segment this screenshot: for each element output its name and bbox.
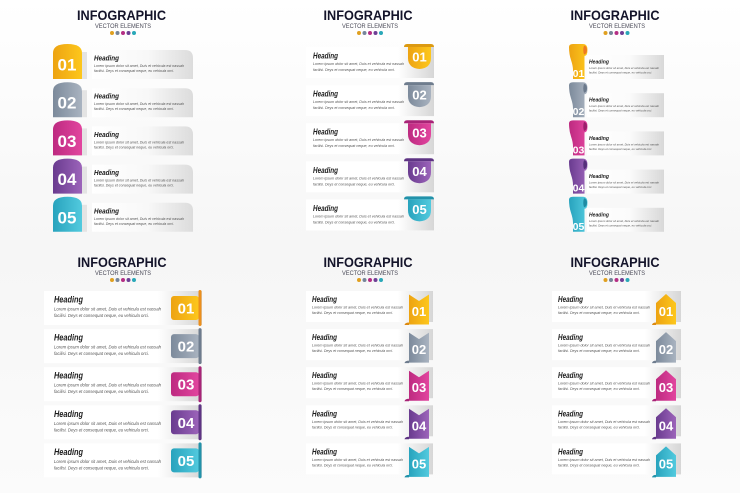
row 03 xyxy=(306,120,434,154)
row 05: facilisi. Deys et consequat neque, eu vehicula orci. xyxy=(94,222,174,226)
row 01: facilisi. Deys et consequat neque, eu vehicula orci. xyxy=(312,311,393,315)
row 01: Lorem ipsum dolor sit amet, Duis et vehicula est nassah xyxy=(313,62,404,66)
row 03: Lorem ipsum dolor sit amet, Duis et vehicula est nassah xyxy=(94,140,184,144)
colour dots xyxy=(604,278,630,282)
panel: bottom centre, notched tabs xyxy=(306,254,433,477)
panel: top left, arched tabs xyxy=(53,7,193,232)
row 01: Lorem ipsum dolor sit amet, Duis et vehicula est nassah xyxy=(94,64,184,68)
row 05: Heading xyxy=(94,208,120,215)
row 04: 04 xyxy=(178,415,195,432)
row 03: 03 xyxy=(659,380,673,395)
row 03 xyxy=(44,366,202,402)
row 03: Lorem ipsum dolor sit amet, Duis et vehicula est nassah xyxy=(558,382,650,386)
row 03: facilisi. Deys et consequat neque, eu vehicula orci. xyxy=(94,145,174,149)
row 04: Heading xyxy=(558,409,583,418)
row 03: Heading xyxy=(94,132,120,139)
row 02: facilisi. Deys et consequat neque, eu vehicula orci. xyxy=(589,109,652,113)
panel: top centre, shield tabs xyxy=(306,7,434,230)
row 05: Lorem ipsum dolor sit amet, Duis et vehicula est nassah xyxy=(589,219,659,223)
subtitle: VECTOR ELEMENTS xyxy=(342,23,399,30)
row 05: 05 xyxy=(412,202,427,217)
row 05: 05 xyxy=(659,456,673,471)
row 04: Lorem ipsum dolor sit amet, Duis et vehicula est nassah xyxy=(94,179,184,183)
row 04: Lorem ipsum dolor sit amet, Duis et vehicula est nassah xyxy=(54,421,162,426)
subtitle: VECTOR ELEMENTS xyxy=(95,270,152,277)
row 04: facilisi. Deys et consequat neque, eu vehicula orci. xyxy=(558,425,640,429)
row 04 xyxy=(53,159,193,194)
row 01: Heading xyxy=(558,295,583,304)
row 03: 03 xyxy=(573,144,584,156)
row 05: 05 xyxy=(58,208,76,227)
row 01: Heading xyxy=(94,56,120,62)
row 05: Heading xyxy=(558,447,583,456)
row 05: Heading xyxy=(313,204,338,213)
row 02: Lorem ipsum dolor sit amet, Duis et vehicula est nassah xyxy=(313,100,404,104)
row 04: Lorem ipsum dolor sit amet, Duis et vehicula est nassah xyxy=(313,176,404,180)
row 05: Lorem ipsum dolor sit amet, Duis et vehicula est nassah xyxy=(312,458,403,462)
row 02: facilisi. Deys et consequat neque, eu vehicula orci. xyxy=(54,351,149,356)
row 04 xyxy=(306,158,434,192)
row 02 xyxy=(53,82,193,117)
row 05 xyxy=(306,196,434,230)
row 01: Lorem ipsum dolor sit amet, Duis et vehicula est nassah xyxy=(558,306,650,310)
row 05: Heading xyxy=(54,447,83,457)
row 02: 02 xyxy=(58,94,76,113)
row 05 xyxy=(552,443,681,477)
row 01: facilisi. Deys et consequat neque, eu vehicula orci. xyxy=(589,70,652,74)
row 02 xyxy=(552,329,681,363)
row 01 xyxy=(53,44,193,79)
row 03: Heading xyxy=(558,371,583,380)
row 04: 04 xyxy=(573,183,584,195)
row 03: facilisi. Deys et consequat neque, eu vehicula orci. xyxy=(589,147,652,151)
row 03: facilisi. Deys et consequat neque, eu vehicula orci. xyxy=(54,389,149,394)
row 02: 02 xyxy=(412,342,426,357)
row 05 xyxy=(44,442,202,478)
row 03: Heading xyxy=(312,371,337,380)
row 02: Heading xyxy=(313,90,338,99)
row 01: 01 xyxy=(659,304,673,319)
row 02: Lorem ipsum dolor sit amet, Duis et vehicula est nassah xyxy=(589,104,659,108)
row 01: Heading xyxy=(589,60,610,66)
row 03: Heading xyxy=(54,371,83,381)
row 05: facilisi. Deys et consequat neque, eu vehicula orci. xyxy=(589,223,652,227)
row 04: Heading xyxy=(94,170,120,177)
row 05 xyxy=(569,197,664,233)
row 02: Heading xyxy=(54,333,83,343)
row 01: facilisi. Deys et consequat neque, eu vehicula orci. xyxy=(313,68,395,72)
row 05: 05 xyxy=(412,456,426,471)
row 01: 01 xyxy=(412,304,426,319)
row 04: Heading xyxy=(313,166,338,175)
row 03: facilisi. Deys et consequat neque, eu vehicula orci. xyxy=(313,144,395,148)
row 04 xyxy=(569,159,664,195)
row 05: facilisi. Deys et consequat neque, eu vehicula orci. xyxy=(54,465,149,470)
row 05 xyxy=(53,197,193,232)
row 02: facilisi. Deys et consequat neque, eu vehicula orci. xyxy=(312,349,393,353)
row 02: facilisi. Deys et consequat neque, eu vehicula orci. xyxy=(558,349,640,353)
row 02: 02 xyxy=(659,342,673,357)
row 04 xyxy=(552,405,681,439)
row 02: facilisi. Deys et consequat neque, eu vehicula orci. xyxy=(313,106,395,110)
row 02: 02 xyxy=(178,339,194,356)
row 01: 01 xyxy=(573,68,584,80)
row 05: facilisi. Deys et consequat neque, eu vehicula orci. xyxy=(313,220,395,224)
row 03: facilisi. Deys et consequat neque, eu vehicula orci. xyxy=(558,387,640,391)
row 01: 01 xyxy=(178,300,194,318)
row 04: facilisi. Deys et consequat neque, eu vehicula orci. xyxy=(312,425,393,429)
row 02: 02 xyxy=(412,88,427,103)
row 02: Lorem ipsum dolor sit amet, Duis et vehicula est nassah xyxy=(94,102,184,106)
row 04 xyxy=(44,404,202,440)
row 02 xyxy=(44,328,202,364)
row 03: facilisi. Deys et consequat neque, eu vehicula orci. xyxy=(312,387,393,391)
row 03: 03 xyxy=(178,377,194,394)
row 05: Lorem ipsum dolor sit amet, Duis et vehicula est nassah xyxy=(54,459,162,464)
row 05: facilisi. Deys et consequat neque, eu vehicula orci. xyxy=(312,463,393,467)
row 05: Heading xyxy=(312,447,337,456)
row 03: Heading xyxy=(313,128,338,137)
colour dots xyxy=(110,278,136,282)
colour dots xyxy=(604,31,630,35)
row 04: facilisi. Deys et consequat neque, eu vehicula orci. xyxy=(589,185,652,189)
row 04: Heading xyxy=(312,409,337,418)
row 01: Heading xyxy=(313,52,338,60)
row 02 xyxy=(569,82,664,118)
row 03 xyxy=(552,367,681,401)
row 02: Heading xyxy=(589,98,610,104)
colour dots xyxy=(357,278,383,282)
row 03: 03 xyxy=(412,380,426,395)
row 03: Lorem ipsum dolor sit amet, Duis et vehicula est nassah xyxy=(313,138,404,142)
row 01 xyxy=(44,290,202,326)
row 03 xyxy=(569,120,664,156)
colour dots xyxy=(110,31,136,35)
panel: bottom left, rounded tabs with strip xyxy=(44,254,202,478)
title: INFOGRAPHIC xyxy=(324,7,412,23)
title: INFOGRAPHIC xyxy=(570,254,660,270)
row 01: 01 xyxy=(412,50,427,64)
row 03: 03 xyxy=(58,132,76,151)
row 03: Lorem ipsum dolor sit amet, Duis et vehicula est nassah xyxy=(312,382,403,386)
row 01 xyxy=(569,44,664,80)
title: INFOGRAPHIC xyxy=(570,7,660,23)
row 03 xyxy=(53,120,193,155)
row 03 xyxy=(306,367,433,401)
row 04: facilisi. Deys et consequat neque, eu vehicula orci. xyxy=(54,427,149,432)
row 05: Heading xyxy=(589,212,610,218)
row 02 xyxy=(306,82,434,116)
row 02: facilisi. Deys et consequat neque, eu vehicula orci. xyxy=(94,107,174,111)
row 03: Heading xyxy=(589,136,610,142)
colour dots xyxy=(357,31,383,35)
row 02 xyxy=(306,329,433,363)
row 01: 01 xyxy=(58,56,76,74)
title: INFOGRAPHIC xyxy=(77,7,166,23)
row 04: Lorem ipsum dolor sit amet, Duis et vehicula est nassah xyxy=(312,420,403,424)
row 01 xyxy=(552,291,681,325)
row 02: 02 xyxy=(573,106,584,118)
title: INFOGRAPHIC xyxy=(324,254,412,270)
row 01: Lorem ipsum dolor sit amet, Duis et vehicula est nassah xyxy=(589,66,659,70)
row 05: Lorem ipsum dolor sit amet, Duis et vehicula est nassah xyxy=(313,214,404,218)
row 05: Lorem ipsum dolor sit amet, Duis et vehicula est nassah xyxy=(558,458,650,462)
row 03: Lorem ipsum dolor sit amet, Duis et vehicula est nassah xyxy=(589,142,659,146)
row 04: Heading xyxy=(589,174,610,180)
row 05: 05 xyxy=(573,221,584,233)
row 05: facilisi. Deys et consequat neque, eu vehicula orci. xyxy=(558,463,640,467)
row 05: 05 xyxy=(178,453,194,470)
row 01 xyxy=(306,291,433,325)
row 04: 04 xyxy=(412,164,427,179)
row 01: Heading xyxy=(312,295,337,304)
row 04: facilisi. Deys et consequat neque, eu vehicula orci. xyxy=(313,182,395,186)
row 02: Heading xyxy=(94,94,120,101)
row 05: Lorem ipsum dolor sit amet, Duis et vehicula est nassah xyxy=(94,217,184,221)
row 04: 04 xyxy=(659,418,674,433)
row 04: Lorem ipsum dolor sit amet, Duis et vehicula est nassah xyxy=(589,181,659,185)
row 01: facilisi. Deys et consequat neque, eu vehicula orci. xyxy=(54,313,149,318)
row 01: facilisi. Deys et consequat neque, eu vehicula orci. xyxy=(94,69,174,73)
row 01: facilisi. Deys et consequat neque, eu vehicula orci. xyxy=(558,311,640,315)
panel: top right, ribbon tabs xyxy=(569,7,664,233)
row 01: Lorem ipsum dolor sit amet, Duis et vehicula est nassah xyxy=(54,306,162,312)
row 01: Lorem ipsum dolor sit amet, Duis et vehicula est nassah xyxy=(312,306,403,310)
subtitle: VECTOR ELEMENTS xyxy=(342,270,399,277)
row 02: Lorem ipsum dolor sit amet, Duis et vehicula est nassah xyxy=(558,344,650,348)
row 05 xyxy=(306,443,433,477)
row 03: 03 xyxy=(412,126,427,141)
row 02: Heading xyxy=(558,333,583,342)
row 04: Lorem ipsum dolor sit amet, Duis et vehicula est nassah xyxy=(558,420,650,424)
subtitle: VECTOR ELEMENTS xyxy=(589,23,646,30)
panel: bottom right, house-shaped tabs xyxy=(552,254,681,477)
row 04 xyxy=(306,405,433,439)
row 04: 04 xyxy=(412,418,427,433)
row 01: Heading xyxy=(54,294,83,304)
row 04: facilisi. Deys et consequat neque, eu vehicula orci. xyxy=(94,184,174,188)
row 02: Lorem ipsum dolor sit amet, Duis et vehicula est nassah xyxy=(54,345,162,350)
row 02: Lorem ipsum dolor sit amet, Duis et vehicula est nassah xyxy=(312,344,403,348)
row 04: Heading xyxy=(54,409,83,419)
row 01 xyxy=(306,44,434,78)
row 04: 04 xyxy=(58,170,77,189)
title: INFOGRAPHIC xyxy=(78,254,166,270)
row 02: Heading xyxy=(312,333,337,342)
subtitle: VECTOR ELEMENTS xyxy=(589,270,646,277)
subtitle: VECTOR ELEMENTS xyxy=(95,23,152,30)
row 03: Lorem ipsum dolor sit amet, Duis et vehicula est nassah xyxy=(54,383,162,388)
